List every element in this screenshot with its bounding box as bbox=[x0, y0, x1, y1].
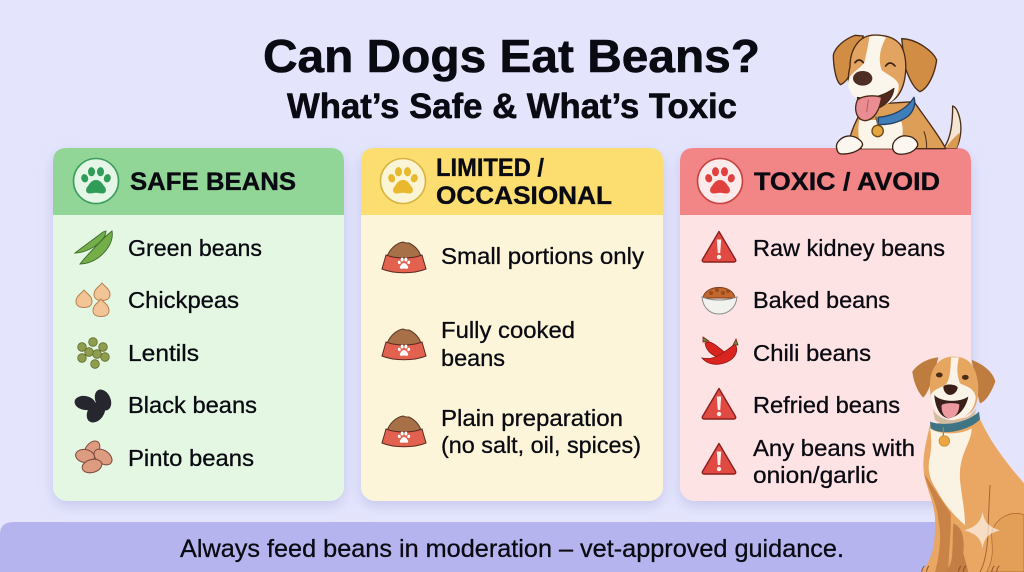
icon: black beans bbox=[73, 387, 114, 426]
icon: bowl 1 bbox=[382, 242, 426, 273]
dog illustration: top, peeking over the toxic panel bbox=[833, 35, 961, 154]
onion garlic label bbox=[753, 435, 915, 488]
toxic heading: TOXIC / AVOID bbox=[754, 168, 940, 196]
plain preparation label bbox=[441, 405, 641, 458]
footer banner bbox=[0, 522, 970, 572]
limited heading: LIMITED / bbox=[436, 154, 544, 182]
panel: toxic bbox=[680, 148, 971, 501]
icon: green beans bbox=[75, 231, 112, 264]
icon: bowl 2 bbox=[382, 329, 426, 360]
icon: warning 2 bbox=[702, 388, 736, 419]
icon: pinto beans bbox=[75, 438, 115, 475]
icon: green paw bbox=[74, 158, 118, 204]
panel: limited bbox=[361, 148, 663, 501]
title: Can Dogs Eat Beans? bbox=[263, 30, 760, 82]
fully cooked label bbox=[441, 317, 575, 371]
plain preparation label: Plain preparation bbox=[441, 405, 623, 431]
safe heading: SAFE BEANS bbox=[130, 168, 296, 196]
toxic header band bbox=[680, 148, 971, 215]
icon: baked beans bowl bbox=[702, 288, 737, 314]
icon: chili peppers bbox=[702, 337, 738, 364]
icon: lentils bbox=[78, 338, 109, 368]
icon: bowl 3 bbox=[382, 416, 426, 447]
limited heading bbox=[436, 154, 612, 210]
raw kidney label: Raw kidney beans bbox=[753, 235, 945, 261]
plain preparation label: (no salt, oil, spices) bbox=[441, 432, 641, 458]
footer banner: Always feed beans in moderation – vet-approved guidance. bbox=[180, 535, 844, 563]
baked beans label: Baked beans bbox=[753, 287, 890, 313]
icon: red paw bbox=[698, 158, 742, 204]
onion garlic label: onion/garlic bbox=[753, 462, 878, 488]
small portions label: Small portions only bbox=[441, 243, 645, 269]
subtitle: What’s Safe & What’s Toxic bbox=[287, 87, 737, 126]
fully cooked label: Fully cooked bbox=[441, 317, 575, 343]
icon: yellow paw bbox=[380, 158, 426, 204]
icon: warning 1 bbox=[702, 232, 736, 262]
limited heading: OCCASIONAL bbox=[436, 182, 612, 210]
dog illustration: sitting, bottom right bbox=[912, 357, 1024, 572]
icon: warning 3 bbox=[702, 444, 736, 474]
safe header band bbox=[53, 148, 344, 215]
panel: safe beans bbox=[53, 148, 344, 501]
onion garlic label: Any beans with bbox=[753, 435, 915, 461]
icon: chickpeas bbox=[76, 283, 110, 316]
limited header band bbox=[361, 148, 663, 215]
lentils label: Lentils bbox=[128, 340, 199, 366]
pinto beans label: Pinto beans bbox=[128, 445, 254, 471]
green beans label: Green beans bbox=[128, 235, 262, 261]
chickpeas label: Chickpeas bbox=[128, 287, 239, 313]
chili beans label: Chili beans bbox=[753, 340, 871, 366]
sparkle mark bbox=[964, 512, 1000, 548]
refried beans label: Refried beans bbox=[753, 392, 900, 418]
fully cooked label: beans bbox=[441, 345, 505, 371]
black beans label: Black beans bbox=[128, 392, 257, 418]
